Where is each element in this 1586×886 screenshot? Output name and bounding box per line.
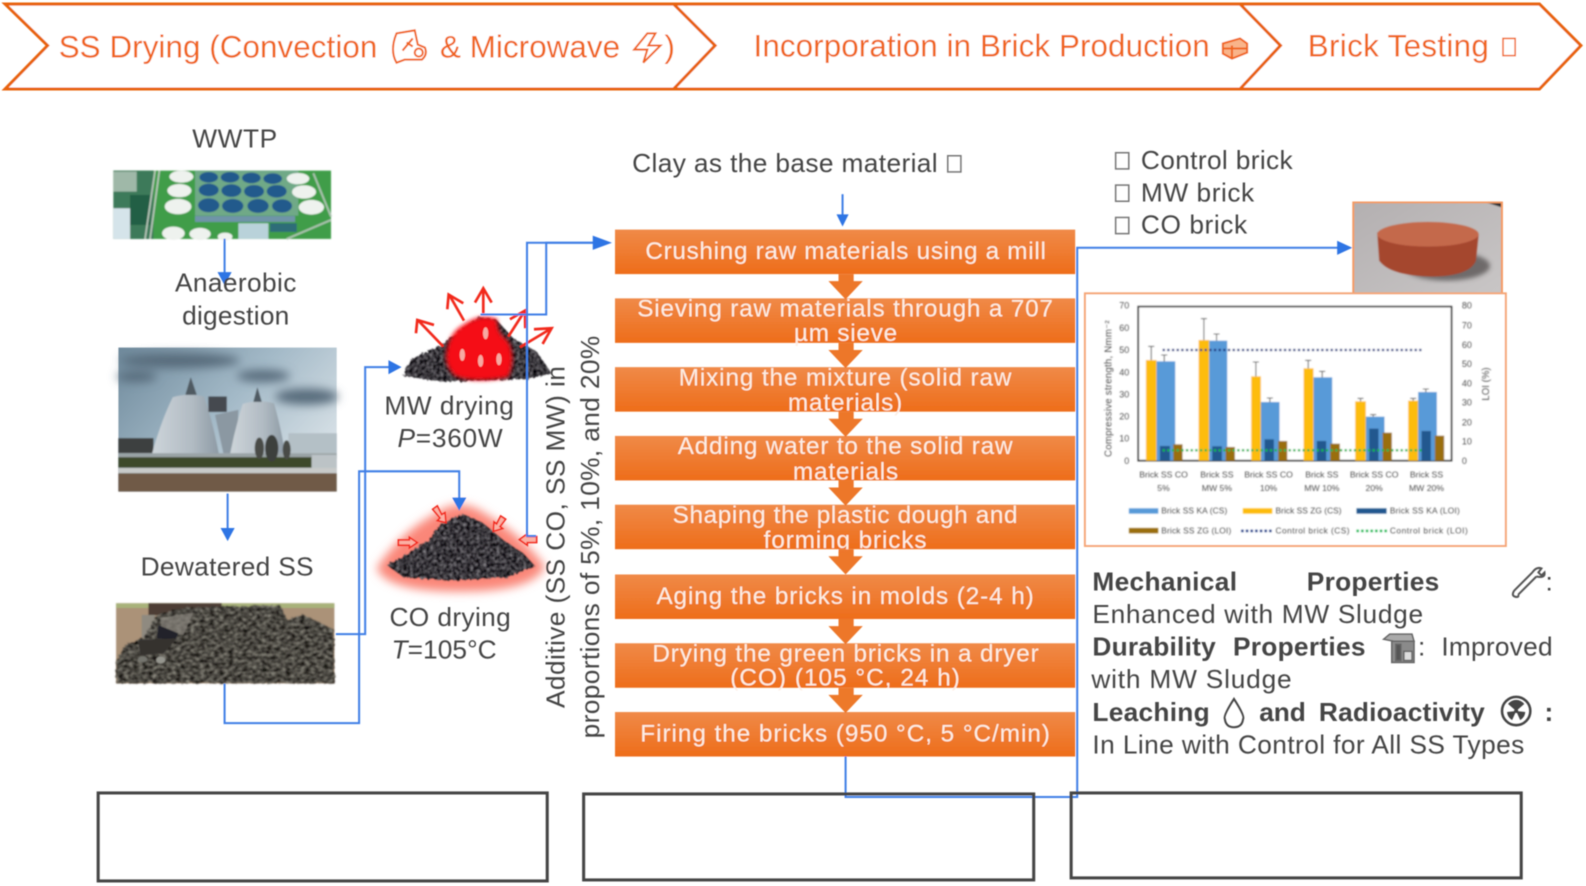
x-axis labels: Brick SS (1200, 470, 1234, 480)
right axis: 20 (1462, 417, 1472, 427)
header: SS drying chevron: ) (665, 30, 675, 65)
empty caption box: right (1071, 793, 1521, 878)
empty caption box: left (98, 793, 547, 881)
x-axis labels: Brick SS CO (1139, 470, 1188, 480)
chart legend (1129, 506, 1468, 536)
step 4 (615, 433, 1075, 485)
text block: test results: and (1259, 697, 1306, 727)
left axis: 30 (1119, 389, 1129, 399)
text block: test results: Leaching (1092, 697, 1210, 727)
label: additive proportions (540, 336, 605, 738)
icon: red heat arrows (398, 506, 537, 548)
right axis (1462, 301, 1472, 466)
text block: test results: Properties (1307, 567, 1439, 597)
step 8: Firing the bricks (950 °C, 5 °C/min) (640, 720, 1050, 747)
left axis (1119, 301, 1129, 466)
right axis: 40 (1462, 378, 1472, 388)
text block: test results: Mechanical (1092, 567, 1237, 597)
text block: test results: In Line with Control for All SS Types (1092, 730, 1524, 760)
x-axis labels: Brick SS CO (1350, 470, 1399, 480)
text block: test results: Improved (1441, 631, 1553, 661)
step 4: Adding water to the solid raw (678, 433, 1013, 460)
text block: test results (1090, 567, 1553, 760)
step 5: Shaping the plastic dough and (673, 502, 1018, 529)
flowchart: brick production steps (615, 230, 1075, 757)
connector: dewatered SS to MW drying (336, 360, 402, 634)
left axis: 20 (1119, 412, 1129, 422)
x-axis labels: MW 20% (1409, 483, 1444, 493)
label: anaerobic digestion: digestion (182, 301, 289, 331)
step 5 (615, 502, 1075, 554)
photo: wastewater treatment plant (113, 171, 331, 241)
bars: Brick SS ZG (LOI) (1173, 433, 1444, 461)
x-axis labels: MW 5% (1202, 483, 1232, 493)
label: WWTP: WWTP (192, 124, 277, 154)
label: CO drying: CO drying (389, 602, 511, 632)
axis titles: Compressive strength, Nmm⁻² (1104, 320, 1115, 457)
text block: test results: : (1545, 567, 1553, 597)
control brick lines (1163, 347, 1423, 354)
error bars (1148, 319, 1429, 417)
x-axis labels: 20% (1366, 483, 1383, 493)
legend: brick types: CO brick (1141, 210, 1248, 240)
legend: brick types: Control brick (1141, 145, 1293, 175)
step 8 (615, 712, 1075, 757)
label: anaerobic digestion: Anaerobic (175, 267, 296, 297)
label: CO drying (389, 602, 511, 664)
text block: test results: Enhanced with MW Sludge (1092, 599, 1423, 629)
step 7: (CO) (105 °C, 24 h) (730, 665, 960, 692)
axis titles (1104, 320, 1492, 457)
bars: Brick SS KA (LOI) (1160, 429, 1431, 461)
icon: red vapour arrows (416, 288, 552, 347)
right axis: 0 (1462, 456, 1467, 466)
right axis: 80 (1462, 301, 1472, 311)
label: CO drying: T=105°C (391, 634, 497, 664)
header: SS drying chevron (5, 4, 715, 89)
x-axis labels: Brick SS (1305, 470, 1339, 480)
x-axis labels: MW 10% (1304, 483, 1340, 493)
icon: convection-dried sludge mound (377, 505, 545, 592)
chart legend: Brick SS ZG (LOI) (1161, 526, 1231, 536)
step 1: Crushing raw materials using a mill (645, 238, 1046, 265)
left axis: 40 (1119, 367, 1129, 377)
step 4: materials (793, 458, 898, 485)
label: dewatered SS: Dewatered SS (141, 551, 314, 581)
label: additive proportions: proportions of 5%, 10%, and 20% (575, 336, 605, 738)
axis titles: LOI (%) (1481, 367, 1492, 401)
right axis: 70 (1462, 320, 1472, 330)
right axis: 30 (1462, 398, 1472, 408)
step 3 (615, 364, 1075, 417)
bars: Brick SS KA (CS) (1157, 341, 1437, 461)
step 7 (615, 640, 1075, 692)
icon: lightning bolt (634, 33, 661, 63)
header: SS drying chevron: SS Drying (Convection (59, 30, 377, 65)
text block: test results: : (1544, 697, 1553, 727)
plot frame (1138, 307, 1452, 461)
step 2: Sieving raw materials through a 707 (637, 296, 1053, 323)
icon: microwave-dried sludge mound (403, 288, 552, 382)
step 2: µm sieve (794, 320, 897, 347)
chart legend: Control brick (LOI) (1390, 526, 1468, 536)
bars: Brick SS ZG (CS) (1146, 340, 1418, 461)
chart: compressive strength and LOI (1085, 293, 1506, 546)
step 1 (615, 230, 1075, 274)
chart legend: Brick SS KA (CS) (1161, 506, 1227, 516)
text block: test results: with MW Sludge (1090, 664, 1292, 694)
connector: dewatered SS to CO drying (225, 471, 466, 723)
connector: firing to brick testing (846, 241, 1352, 797)
left axis: 50 (1119, 345, 1129, 355)
right axis: 50 (1462, 359, 1472, 369)
icon: convection hand dryer (393, 30, 426, 63)
text block: test results: : (1418, 631, 1425, 661)
header: incorporation chevron (674, 4, 1281, 89)
icon: radioactivity (1502, 697, 1530, 725)
chart legend: Brick SS ZG (CS) (1276, 506, 1342, 516)
connector: drying outputs to crushing step (480, 236, 612, 536)
left axis: 0 (1124, 456, 1129, 466)
step 3: Mixing the mixture (solid raw (679, 364, 1012, 391)
chart legend: Brick SS KA (LOI) (1390, 506, 1460, 516)
left axis: 70 (1119, 301, 1129, 311)
legend: brick types (1116, 145, 1293, 240)
step 6 (615, 574, 1075, 619)
step 2 (615, 296, 1075, 347)
x-axis labels: Brick SS CO (1244, 470, 1293, 480)
icon: bricks (1223, 38, 1247, 59)
arrow: WWTP to anaerobic digestion (218, 239, 232, 285)
legend: brick types: MW brick (1141, 177, 1255, 207)
label: clay base material: Clay as the base material (632, 148, 938, 178)
step 7: Drying the green bricks in a dryer (652, 640, 1039, 667)
label: MW drying: MW drying (384, 391, 514, 421)
arrow: digestion to dewatered sludge (221, 494, 235, 541)
right axis: 10 (1462, 436, 1472, 446)
step 5: forming bricks (764, 527, 927, 554)
x-axis labels (1139, 470, 1444, 493)
step 3: materials) (788, 390, 902, 417)
icon: wrench (1513, 568, 1545, 597)
label: anaerobic digestion (175, 267, 296, 331)
header: incorporation chevron: Incorporation in Brick Production (754, 29, 1210, 64)
x-axis labels: 5% (1157, 483, 1170, 493)
arrow: clay to crushing (836, 194, 849, 227)
right axis: 60 (1462, 340, 1472, 350)
chart legend: Control brick (CS) (1276, 526, 1350, 536)
x-axis labels: Brick SS (1410, 470, 1443, 480)
left axis: 60 (1119, 323, 1129, 333)
label: additive proportions: Additive (SS CO, SS MW) in (540, 366, 570, 708)
text block: test results: Radioactivity (1319, 697, 1485, 727)
empty caption box: centre (584, 794, 1034, 880)
arrows between steps (828, 274, 863, 713)
text block: test results: Properties (1233, 631, 1365, 661)
header: brick testing chevron (1240, 4, 1581, 89)
x-axis labels: 10% (1260, 483, 1278, 493)
header: brick testing chevron: Brick Testing (1308, 29, 1489, 64)
photo: digester towers (117, 348, 338, 492)
label: MW drying: P=360W (398, 423, 503, 453)
photo: fired brick sample (1353, 202, 1502, 294)
label: MW drying (384, 391, 514, 453)
photo: dewatered sludge pile (116, 603, 334, 683)
left axis: 10 (1119, 434, 1129, 444)
header: SS drying chevron: & Microwave (440, 30, 620, 65)
icon: water drop (1225, 699, 1243, 727)
step 6: Aging the bricks in molds (2-4 h) (656, 583, 1034, 610)
icon: durability building (1384, 634, 1414, 662)
text block: test results: Durability (1092, 631, 1216, 661)
